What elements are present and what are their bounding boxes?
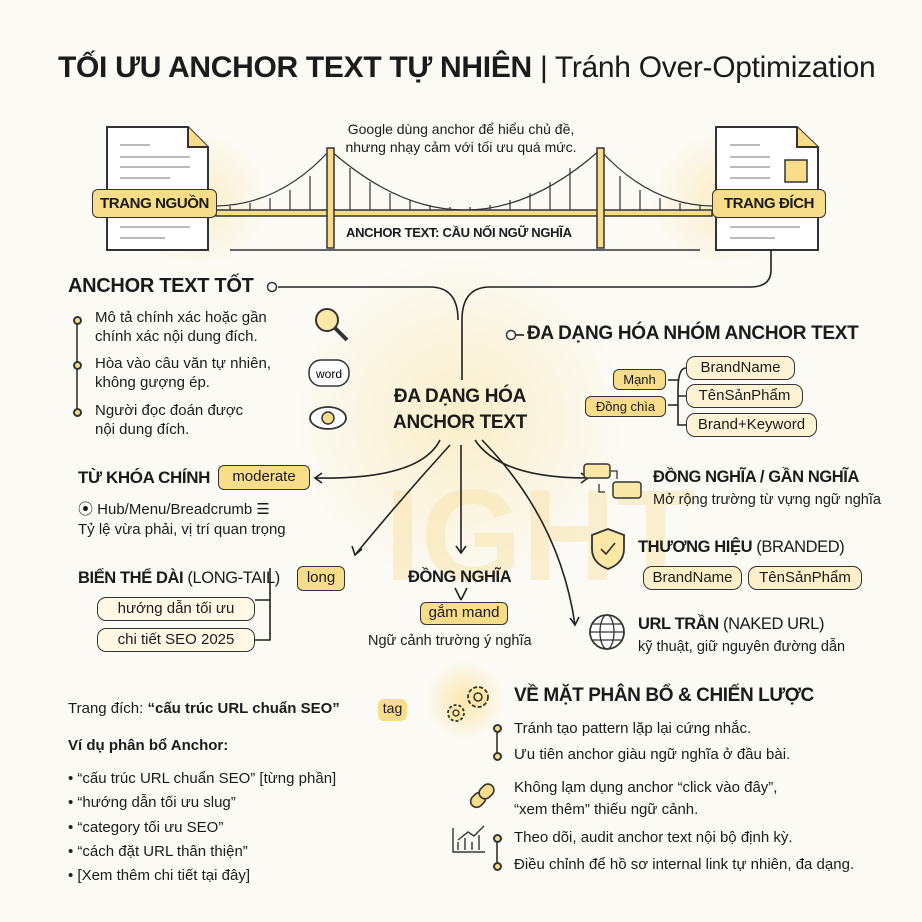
panel: anchor text tot: không gượng ép.: [95, 374, 210, 391]
panel: vi du phan bo: • “category tối ưu SEO”: [68, 819, 223, 836]
panel: anchor text tot: Người đọc đoán được: [95, 402, 243, 419]
panel: url tran: URL TRẦN (NAKED URL): [638, 615, 824, 633]
label: trang nguon: [92, 189, 217, 218]
panel: dong nghia: ĐỒNG NGHĨA: [408, 568, 511, 586]
panel: anchor text tot: ANCHOR TEXT TỐT: [68, 275, 254, 297]
panel: dong nghia: [368, 567, 532, 649]
panel: thuong hieu: TênSảnPhẩm: [759, 569, 851, 586]
panel: anchor text tot: [68, 274, 271, 438]
panel: nhom anchor: ĐA DẠNG HÓA NHÓM ANCHOR TEXT: [527, 323, 858, 344]
label: trang dich: [712, 189, 826, 218]
panel: tu khoa chinh: moderate: [232, 468, 296, 485]
google note: Google dùng anchor để hiểu chủ đề,: [348, 121, 574, 137]
panel: ve mat phan bo: VỀ MẶT PHÂN BỔ & CHIẾN LƯỢC: [514, 685, 814, 706]
panel: vi du phan bo: Ví dụ phân bổ Anchor:: [68, 737, 228, 754]
panel: nhom anchor: TênSảnPhẩm: [699, 387, 790, 404]
google note: [345, 121, 577, 155]
panel: thuong hieu: THƯƠNG HIỆU (BRANDED): [638, 538, 844, 556]
panel: vi du phan bo: • “cấu trúc URL chuẩn SEO” [từng phần]: [68, 770, 336, 787]
panel: bien the dai: hướng dẫn tối ưu: [118, 600, 234, 617]
panel: vi du phan bo: tag: [383, 700, 402, 716]
panel: nhom anchor: Mạnh: [623, 372, 656, 387]
panel: dong nghia / gan nghia: ĐỒNG NGHĨA / GẦN NGHĨA: [653, 468, 859, 486]
panel: anchor text tot: Mô tả chính xác hoặc gần: [95, 309, 267, 326]
panel: ve mat phan bo: Điều chỉnh để hồ sơ internal link tự nhiên, đa dạng.: [514, 856, 854, 873]
panel: anchor text tot: chính xác nội dung đích.: [95, 328, 258, 345]
panel: ve mat phan bo: Tránh tạo pattern lặp lại cứng nhắc.: [514, 720, 751, 737]
panel: bien the dai: long: [307, 569, 335, 586]
panel: vi du phan bo: Trang đích: “cấu trúc URL chuẩn SEO”: [68, 700, 340, 717]
connectors: [255, 250, 771, 640]
panel: dong nghia: Ngữ cảnh trường ý nghĩa: [368, 633, 532, 649]
panel: nhom anchor: [527, 322, 859, 437]
panel: ve mat phan bo: “xem thêm” thiếu ngữ cảnh.: [514, 801, 698, 818]
panel: dong nghia / gan nghia: Mở rộng trường từ vựng ngữ nghĩa: [653, 492, 881, 508]
panel: dong nghia / gan nghia: [583, 463, 881, 508]
label: trang dich: TRANG ĐÍCH: [724, 195, 814, 212]
panel: ve mat phan bo: [447, 684, 854, 873]
center heading: ANCHOR TEXT: [393, 412, 527, 433]
panel: nhom anchor: Đồng chìa: [596, 399, 655, 414]
panel: ve mat phan bo: Theo dõi, audit anchor text nội bộ định kỳ.: [514, 829, 793, 846]
google note: nhưng nhạy cảm với tối ưu quá mức.: [345, 139, 577, 155]
panel: bien the dai: chi tiết SEO 2025: [118, 631, 234, 648]
icons: magnifier, word, eye: [308, 308, 350, 430]
panel: ve mat phan bo: Không lạm dụng anchor “click vào đây”,: [514, 779, 777, 796]
panel: thuong hieu: BrandName: [652, 569, 733, 586]
panel: bien the dai: [78, 566, 345, 652]
panel: anchor text tot: Hòa vào câu văn tự nhiên,: [95, 355, 271, 372]
title: TỐI ƯU ANCHOR TEXT TỰ NHIÊN | Tránh Over-Optimization: [58, 51, 875, 84]
panel: tu khoa chinh: [78, 465, 310, 538]
label: trang nguon: TRANG NGUỒN: [100, 195, 209, 212]
center heading: [393, 384, 528, 433]
bridge caption: ANCHOR TEXT: CẦU NỐI NGỮ NGHĨA: [346, 225, 572, 240]
panel: bien the dai: BIẾN THỂ DÀI (LONG-TAIL): [78, 569, 280, 587]
panel: vi du phan bo: [68, 699, 407, 884]
panel: vi du phan bo: • “cách đặt URL thân thiện”: [68, 843, 248, 860]
panel: thuong hieu: [591, 528, 862, 590]
background glows: IGHT: [385, 462, 695, 608]
panel: dong nghia: gắm mand: [429, 604, 499, 621]
panel: vi du phan bo: • “hướng dẫn tối ưu slug”: [68, 794, 236, 811]
panel: vi du phan bo: • [Xem thêm chi tiết tại đây]: [68, 867, 250, 884]
center heading: ĐA DẠNG HÓA: [394, 386, 526, 407]
panel: tu khoa chinh: ⦿ Hub/Menu/Breadcrumb ☰: [78, 501, 270, 518]
icons: magnifier, word, eye: word: [315, 367, 342, 381]
panel: anchor text tot: nội dung đích.: [95, 421, 189, 438]
panel: url tran: kỹ thuật, giữ nguyên đường dẫn: [638, 639, 845, 655]
panel: tu khoa chinh: Tỷ lệ vừa phải, vị trí quan trọng: [78, 521, 286, 538]
panel: tu khoa chinh: TỪ KHÓA CHÍNH: [78, 468, 210, 487]
panel: nhom anchor: Brand+Keyword: [698, 416, 805, 433]
panel: nhom anchor: BrandName: [700, 359, 781, 376]
panel: ve mat phan bo: Ưu tiên anchor giàu ngữ nghĩa ở đầu bài.: [514, 746, 790, 763]
panel: url tran: [589, 614, 845, 655]
